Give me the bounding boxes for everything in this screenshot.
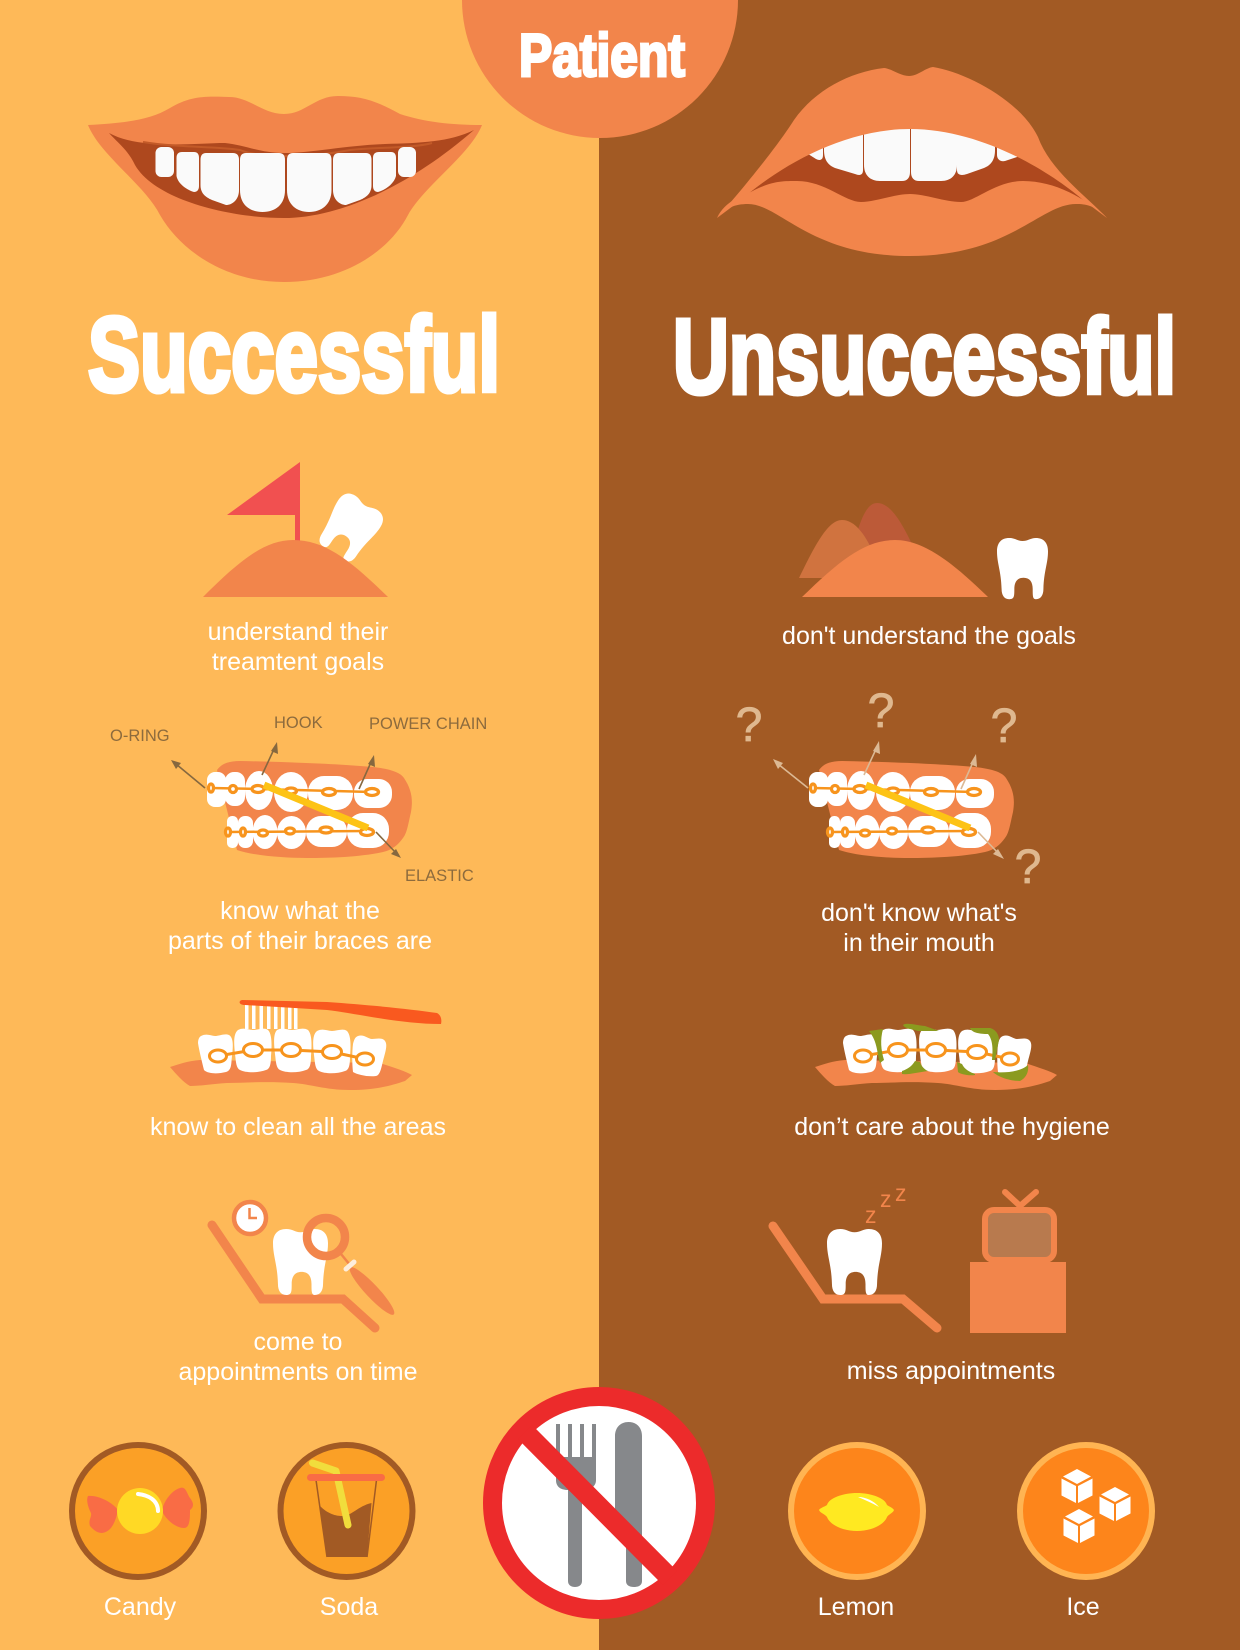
text: know parts of braces: parts of their braces are [168,927,432,955]
diagram: braces with question marks [736,685,1041,894]
illustration: frowning open mouth [717,67,1107,256]
label: ice: Ice [1066,1593,1100,1621]
text: dont understand goals: don't understand the goals [782,622,1076,650]
panel: successful background [0,0,600,1650]
label: candy: Candy [104,1593,177,1621]
text: appointments on time: come to [254,1328,342,1356]
heading: Successful: Successful [88,296,500,414]
part labels: O-RING [110,727,170,745]
clock [234,1202,266,1234]
zzz: z [880,1186,892,1212]
text: dont know mouth: don't know what's [821,899,1017,927]
title badge [462,0,738,138]
icon: candy [72,1445,204,1577]
fork [556,1424,596,1587]
question marks: ? [868,685,894,738]
icon: chair with tooth, clock and magnifier [212,1202,399,1328]
question marks: ? [991,700,1017,753]
text: understand goals: treamtent goals [212,648,384,676]
icon: sleeping tooth and TV [773,1180,1066,1333]
text: appointments on time: appointments on time [178,1358,418,1386]
text: know parts of braces [168,897,432,955]
icon: toothbrush and clean teeth [170,1000,441,1090]
part labels: HOOK [274,714,323,732]
text: dont know mouth: in their mouth [843,929,995,957]
arrows [773,741,1004,859]
zzz: z [865,1202,876,1228]
icon: lemon [791,1445,923,1577]
part labels [110,714,487,885]
knife [615,1422,642,1587]
question marks: ? [736,699,762,752]
label: lemon: Lemon [818,1593,894,1621]
part labels: ELASTIC [405,867,474,885]
title badge: Patient [519,22,685,89]
icon: soda [280,1445,412,1577]
magnifier [307,1218,399,1319]
text: appointments on time [178,1328,418,1386]
text: dont know mouth [821,899,1017,957]
text: hygiene: don’t care about the hygiene [794,1113,1110,1141]
icon: ice cubes [1020,1445,1152,1577]
text: understand goals [208,618,388,676]
diagram: braces parts [110,714,487,885]
question marks [736,685,1041,894]
icon: flag on hill with tooth [203,462,388,597]
text: miss appointments: miss appointments [847,1357,1055,1385]
icon: no eating sign [492,1396,706,1610]
arrows [171,742,401,858]
label: soda: Soda [320,1593,378,1621]
part labels: POWER CHAIN [369,715,487,733]
question marks: ? [1015,841,1041,894]
illustration: smiling mouth [88,96,482,282]
icon: hills with tooth [799,503,1048,599]
icon: teeth with plaque [815,1024,1057,1090]
text: know parts of braces: know what the [220,897,380,925]
tv [970,1192,1066,1333]
panel: unsuccessful background [599,0,1240,1650]
text: understand goals: understand their [208,618,388,646]
zzz [865,1180,906,1228]
zzz: z [895,1180,906,1206]
text: clean areas: know to clean all the areas [150,1113,446,1141]
